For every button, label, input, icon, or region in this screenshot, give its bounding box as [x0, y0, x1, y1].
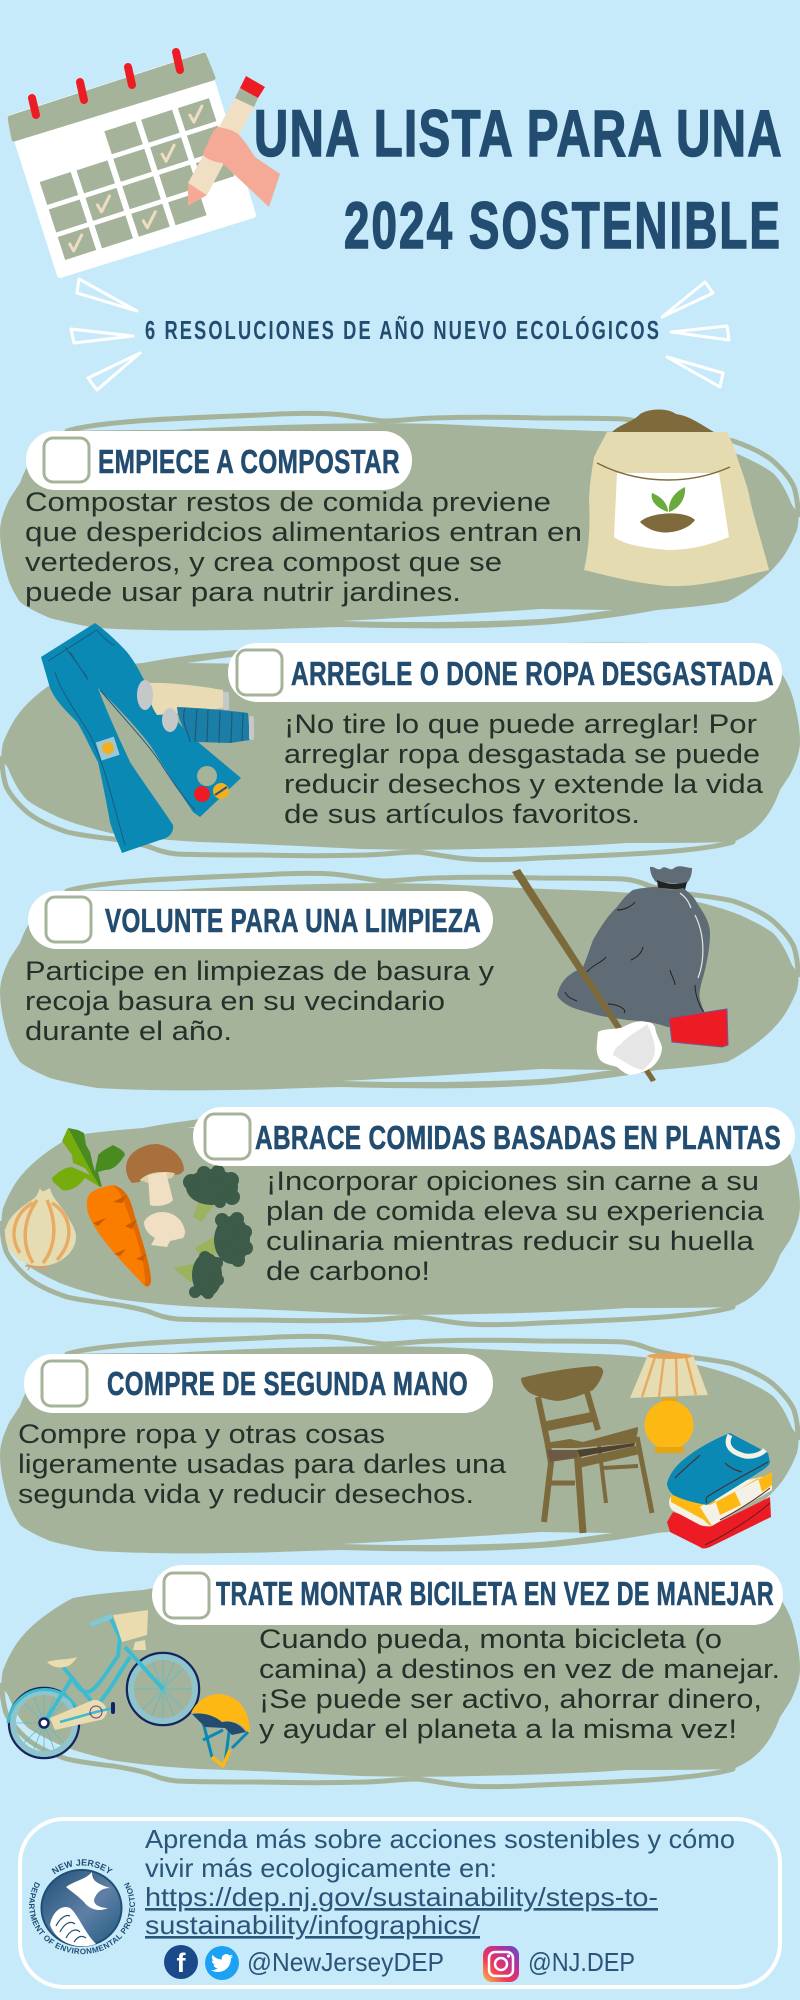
- footer text: https://dep.nj.gov/sustainability/steps-to-: [145, 1882, 658, 1912]
- body text: de carbono!: [266, 1256, 430, 1286]
- logo: NJ DEP seal: DEPARTMENT OF ENVIRONMENTAL PROTECTION: [28, 1882, 135, 1954]
- panel: compost: [0, 410, 798, 630]
- body text: ¡Incorporar opiciones sin carne a su: [266, 1166, 759, 1196]
- body text: que desperidcios alimentarios entran en: [25, 517, 582, 547]
- body text: [25, 487, 582, 607]
- icon: bicycle: [8, 1610, 199, 1758]
- icon: jeans and thread: [41, 623, 254, 853]
- checkbox: [164, 1573, 209, 1618]
- body text: [259, 1624, 780, 1744]
- heading pill: [152, 1565, 783, 1625]
- body text: ¡No tire lo que puede arreglar! Por: [284, 709, 757, 739]
- icon: facebook: [164, 1945, 198, 1979]
- footer text: sustainability/infographics/: [145, 1910, 481, 1940]
- body text: durante el año.: [25, 1016, 232, 1046]
- icon: lamp: [630, 1353, 708, 1453]
- panel: footer: [18, 1817, 782, 1989]
- panel: second hand: [0, 1336, 798, 1553]
- heading: EMPIECE A COMPOSTAR: [98, 443, 400, 480]
- body text: [284, 709, 764, 829]
- body text: camina) a destinos en vez de manejar.: [259, 1654, 780, 1684]
- heading pill: [24, 1354, 493, 1413]
- body text: arreglar ropa desgastada se puede: [284, 739, 760, 769]
- body text: vertederos, y crea compost que se: [25, 547, 502, 577]
- body text: Compre ropa y otras cosas: [18, 1419, 385, 1449]
- heading: VOLUNTE PARA UNA LIMPIEZA: [105, 902, 481, 939]
- body text: Participe en limpiezas de basura y: [25, 956, 495, 986]
- decorative burst rays: [71, 279, 729, 390]
- body text: reducir desechos y extende la vida: [284, 769, 764, 799]
- body text: Cuando pueda, monta bicicleta (o: [259, 1624, 722, 1654]
- icon: compost bag: [584, 410, 769, 586]
- icon: trash bag, stick, paper and cup: [512, 866, 728, 1082]
- body text: plan de comida eleva su experiencia: [266, 1196, 765, 1226]
- facebook and twitter handle: @NewJerseyDEP: [247, 1947, 444, 1977]
- body text: Compostar restos de comida previene: [25, 487, 551, 517]
- panel background blob: [0, 1336, 798, 1553]
- panel: mend clothes: [2, 623, 800, 860]
- panel background blob: [2, 1108, 800, 1325]
- footer text: Aprenda más sobre acciones sostenibles y cómo: [145, 1824, 735, 1854]
- logo: NJ DEP seal: NEW JERSEY: [52, 1859, 113, 1874]
- body text: culinaria mientras reducir su huella: [266, 1226, 755, 1256]
- checkbox: [46, 897, 91, 942]
- checkbox: [44, 438, 89, 482]
- heading pill: [228, 643, 782, 702]
- panel background blob: [0, 873, 798, 1090]
- icon: calendar with pencil and hand: [10, 52, 280, 275]
- footer text: [145, 1824, 735, 1940]
- body text: ligeramente usadas para darles una: [18, 1449, 507, 1479]
- body text: segunda vida y reducir desechos.: [18, 1479, 474, 1509]
- panel background blob: [2, 643, 800, 860]
- heading pill: [28, 891, 493, 949]
- body text: [25, 956, 495, 1046]
- icon: facebook: f: [176, 1948, 186, 1978]
- panel: cleanup: [0, 866, 798, 1090]
- panel background blob: [0, 413, 798, 630]
- footer frame: [20, 1819, 780, 1987]
- panel background blob: [2, 1570, 800, 1787]
- panel: bicycle: [2, 1565, 800, 1787]
- body text: recoja basura en su vecindario: [25, 986, 445, 1016]
- title: [254, 96, 783, 262]
- icon: twitter: [205, 1946, 239, 1980]
- body text: de sus artículos favoritos.: [284, 799, 640, 829]
- body text: ¡Se puede ser activo, ahorrar dinero,: [259, 1684, 762, 1714]
- footer text: vivir más ecologicamente en:: [145, 1853, 497, 1883]
- icon: folded clothes: [667, 1433, 772, 1548]
- icon: vegetables: [5, 1128, 253, 1299]
- body text: y ayudar el planeta a la misma vez!: [259, 1714, 737, 1744]
- checkbox: [237, 650, 282, 695]
- icon: chair: [521, 1366, 652, 1533]
- heading pill: [193, 1107, 795, 1166]
- icon: helmet: [191, 1694, 250, 1766]
- body text: [266, 1166, 765, 1286]
- panel: plant-based foods: [2, 1107, 800, 1325]
- body text: puede usar para nutrir jardines.: [25, 577, 461, 607]
- icon: instagram: [483, 1946, 519, 1982]
- checkbox: [42, 1361, 87, 1406]
- body text: [18, 1419, 507, 1509]
- checkbox: [205, 1114, 250, 1159]
- heading: COMPRE DE SEGUNDA MANO: [107, 1365, 468, 1402]
- heading pill: [26, 431, 412, 490]
- instagram handle: @NJ.DEP: [528, 1947, 635, 1977]
